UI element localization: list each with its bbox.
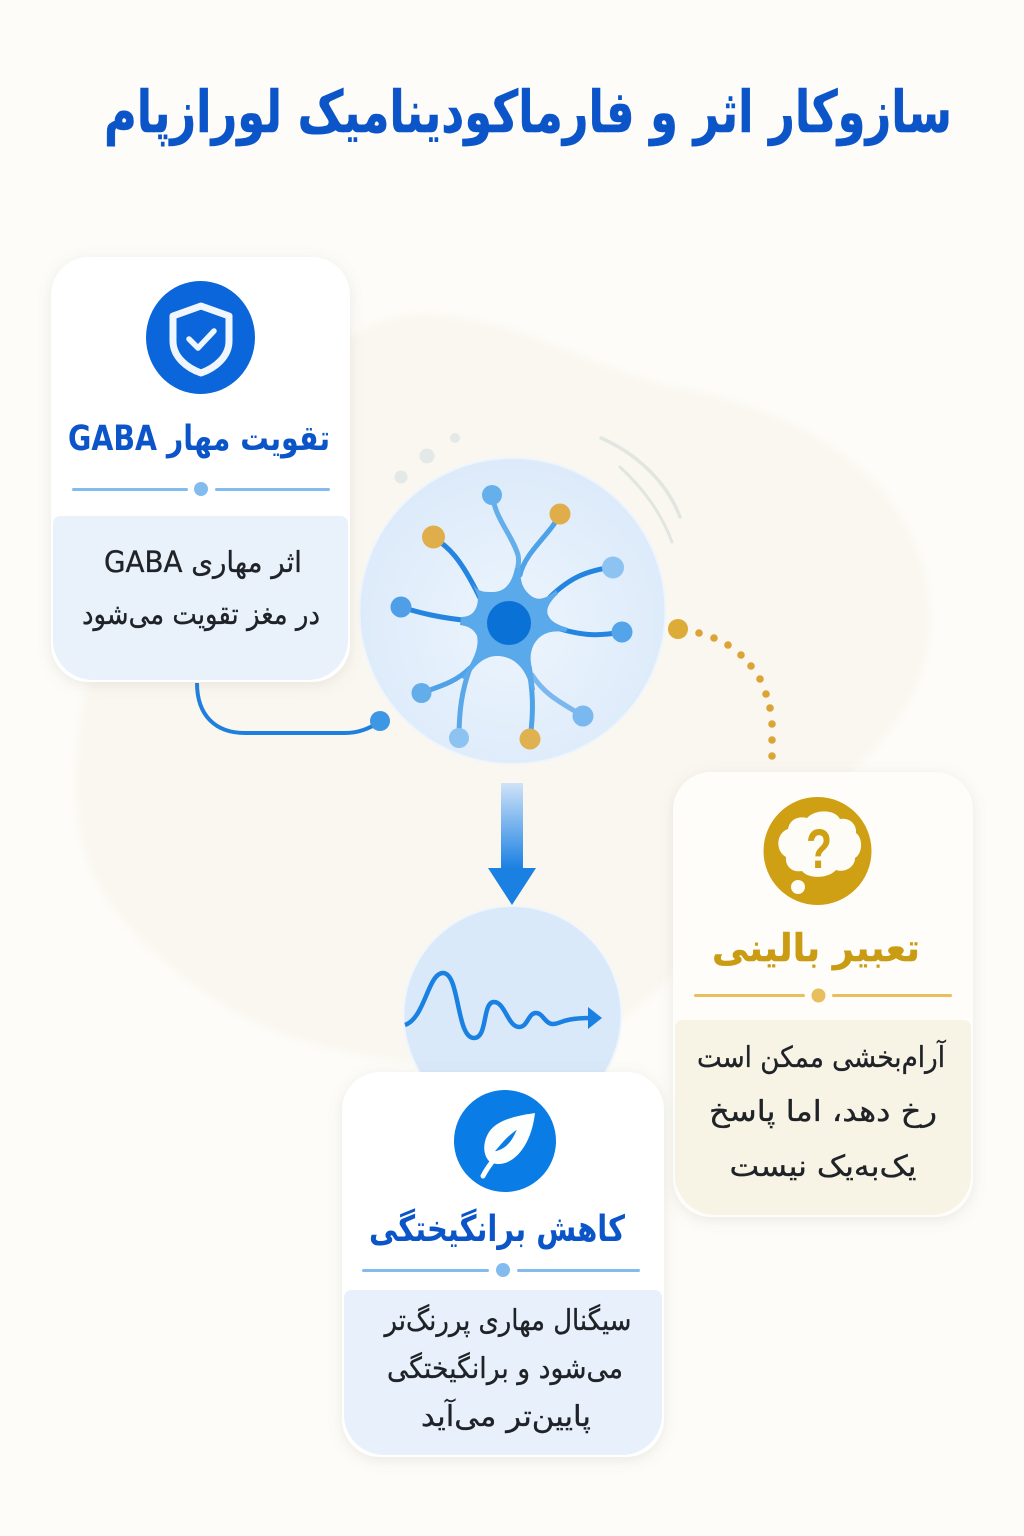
body panel [53, 516, 348, 680]
neuron soma [460, 568, 568, 690]
icon: leaf [454, 1090, 556, 1192]
neuron dendrites [401, 495, 622, 739]
connector: card to neuron [197, 683, 390, 733]
decorative dots and arcs near neuron [394, 433, 680, 542]
heading: کاهش برانگیختگی [369, 1208, 625, 1250]
divider [362, 1263, 640, 1277]
body text: در مغز تقویت می‌شود [82, 597, 320, 631]
body text: اثر مهاری GABA [104, 545, 302, 579]
card: reduced excitability [342, 1072, 664, 1457]
body text: رخ دهد، اما پاسخ [709, 1094, 937, 1129]
heading: تعبیر بالینی [712, 926, 920, 970]
divider [72, 482, 330, 496]
icon: thought bubble with question mark: ? [806, 817, 832, 880]
signal circle [402, 905, 622, 1125]
neuron terminals [390, 485, 632, 750]
neuron circle [358, 457, 666, 765]
body text: سیگنال مهاری پررنگ‌تر [383, 1303, 632, 1338]
icon: thought bubble with question mark [764, 797, 872, 905]
damped wave with arrow [405, 973, 602, 1038]
body text [383, 1303, 632, 1434]
body text [697, 1039, 947, 1183]
heading: تقویت مهار GABA [68, 419, 330, 459]
body text [82, 545, 320, 631]
body panel [344, 1290, 662, 1455]
icon: shield with check [146, 281, 255, 394]
divider [694, 988, 952, 1002]
body panel [675, 1020, 971, 1215]
card: clinical interpretation [673, 772, 973, 1217]
down arrow [488, 783, 536, 905]
neuron nucleus [487, 601, 531, 645]
dotted gold arc [668, 619, 776, 760]
body text: آرام‌بخشی ممکن است [697, 1039, 947, 1074]
card: GABA inhibition [51, 257, 350, 682]
body text: می‌شود و برانگیختگی [387, 1351, 623, 1385]
body text: یک‌به‌یک نیست [730, 1149, 916, 1183]
body text: پایین‌تر می‌آید [421, 1398, 591, 1434]
